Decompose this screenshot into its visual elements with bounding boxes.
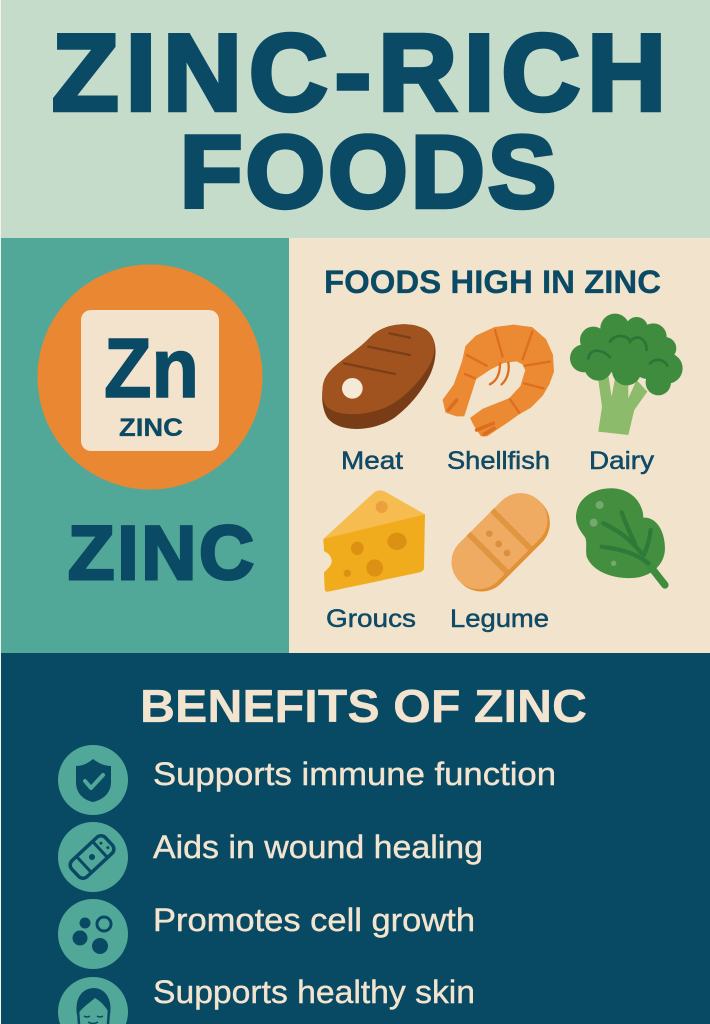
benefit: wound healing: Aids in wound healing xyxy=(153,829,483,865)
title xyxy=(52,12,666,229)
benefit: healthy skin: Supports healthy skin xyxy=(153,974,475,1010)
icon: legume xyxy=(440,482,561,603)
icon: shield xyxy=(58,745,128,815)
benefits heading: BENEFITS OF ZINC xyxy=(140,680,587,732)
icon: face xyxy=(58,977,128,1024)
title: ZINC-RICH xyxy=(52,12,666,134)
label: Groucs: Groucs xyxy=(326,605,416,633)
panel: foods high in zinc xyxy=(289,238,710,653)
icon: zinc element badge: Zn xyxy=(104,321,199,415)
benefit: immune function: Supports immune function xyxy=(153,756,556,792)
label: Legume: Legume xyxy=(450,605,549,633)
foods heading: FOODS HIGH IN ZINC xyxy=(324,264,661,300)
zinc label: ZINC xyxy=(68,511,254,596)
label: Shellfish: Shellfish xyxy=(447,447,550,475)
label: Meat: Meat xyxy=(341,447,403,475)
icon: zinc element badge: ZINC xyxy=(119,414,183,442)
panel: benefits of zinc xyxy=(1,653,710,1024)
icon: spinach leaf xyxy=(576,488,665,585)
panel: title banner xyxy=(1,0,710,238)
icon: cells xyxy=(58,899,128,969)
panel: zinc element xyxy=(1,238,289,653)
icon: shrimp xyxy=(444,326,553,435)
icon: cheese xyxy=(323,490,425,592)
title: FOODS xyxy=(180,115,556,229)
icon: zinc element badge xyxy=(38,264,262,490)
icon: broccoli xyxy=(570,314,683,435)
label: Dairy: Dairy xyxy=(589,447,655,475)
icon: bandage xyxy=(58,822,128,892)
icon: steak xyxy=(322,324,436,429)
benefit: cell growth: Promotes cell growth xyxy=(153,902,475,938)
